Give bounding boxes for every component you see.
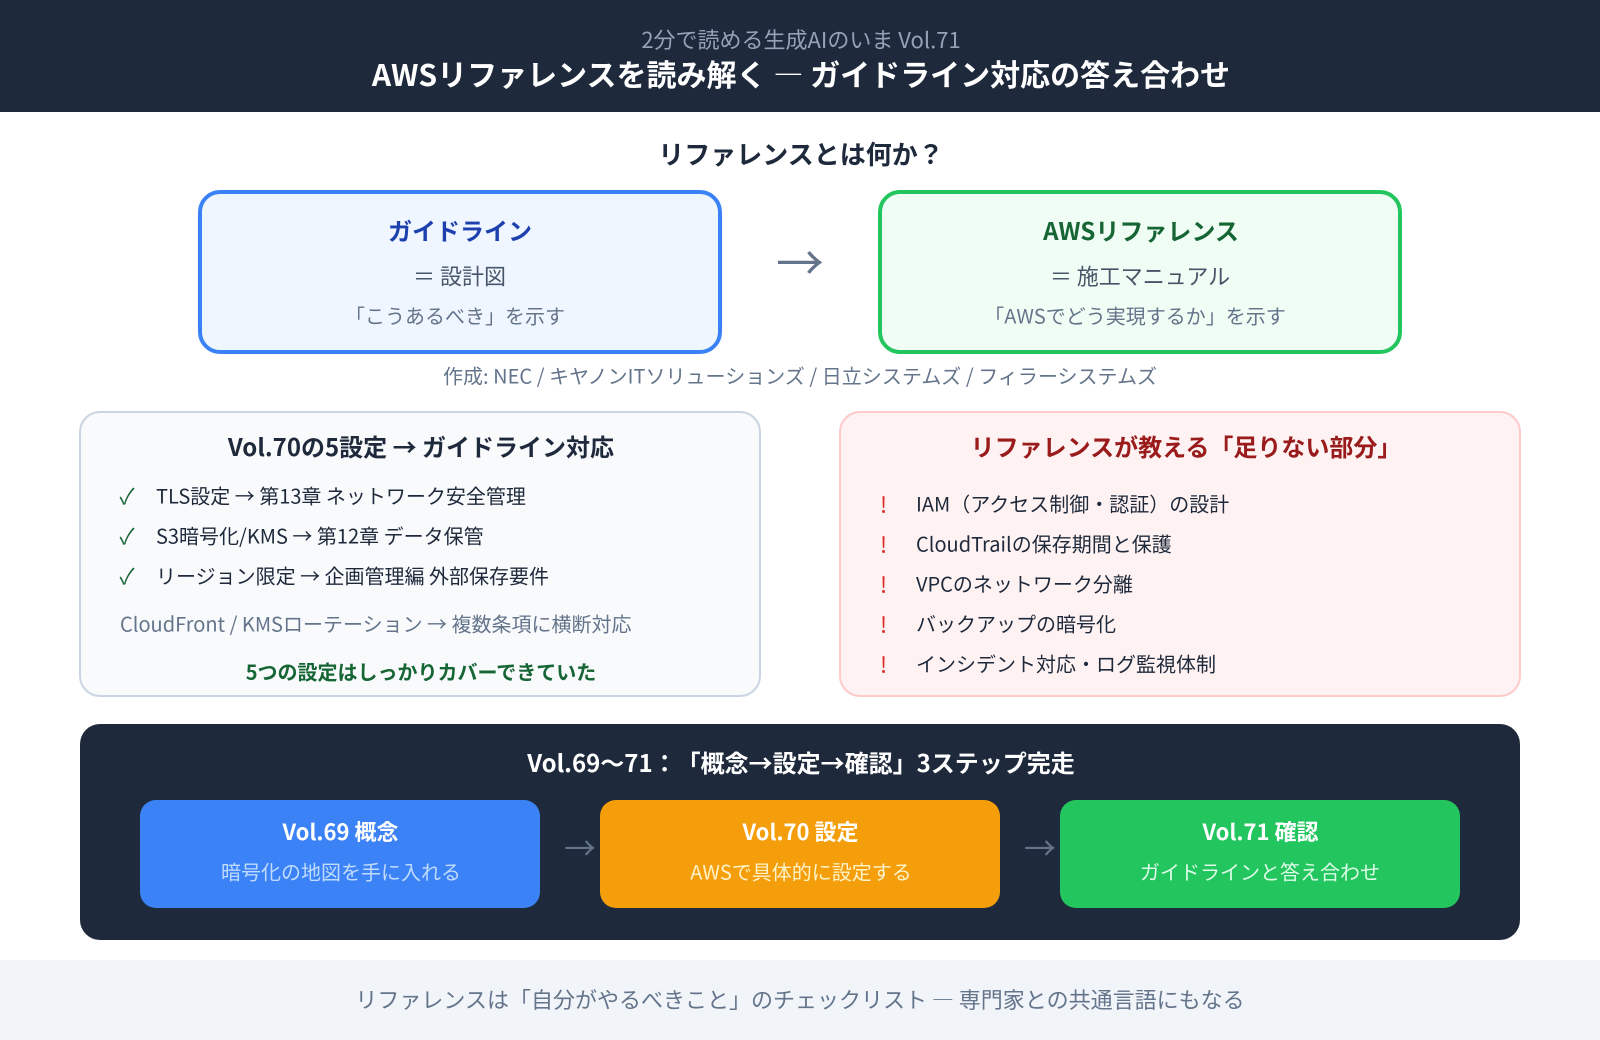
guideline title: ガイドライン (388, 212, 532, 247)
mapping row 3: リージョン限定 → 企画管理編 外部保存要件 (156, 560, 549, 590)
step: Vol.69: 暗号化の地図を手に入れる (221, 856, 461, 886)
mapping row 2: ✓ (120, 519, 136, 551)
missing row 5: ! (880, 648, 887, 680)
missing row 3: ! (880, 568, 887, 600)
footer message: リファレンスは「自分がやるべきこと」のチェックリスト ― 専門家との共通言語にもなる (355, 983, 1245, 1015)
reference title: AWSリファレンス (1042, 212, 1239, 247)
section heading: リファレンスとは何か？ (658, 135, 944, 172)
mapping note: CloudFront / KMSローテーション → 複数条項に横断対応 (120, 608, 632, 638)
panel: Vol.70 settings mapping (80, 412, 760, 696)
panel: three steps (80, 724, 1520, 940)
mapping row 1: ✓ (120, 479, 136, 511)
panel: guideline (200, 192, 720, 352)
missing row 5: インシデント対応・ログ監視体制 (916, 648, 1216, 678)
missing row 1: IAM（アクセス制御・認証）の設計 (916, 488, 1229, 518)
mapping row 1: TLS設定 → 第13章 ネットワーク安全管理 (156, 480, 526, 510)
arrow: guideline to reference: → (776, 224, 824, 294)
missing row 3: VPCのネットワーク分離 (916, 568, 1133, 598)
arrow: step 2 to 3: → (1024, 824, 1056, 870)
missing row 4: ! (880, 608, 887, 640)
step: Vol.71: ガイドラインと答え合わせ (1140, 856, 1380, 886)
panel: AWS reference (880, 192, 1400, 352)
mapping conclusion: 5つの設定はしっかりカバーできていた (246, 656, 596, 686)
mapping row 3: ✓ (120, 559, 136, 591)
step: Vol.70 (600, 800, 1000, 908)
arrow: step 1 to 2: → (564, 824, 596, 870)
header title: AWSリファレンスを読み解く ― ガイドライン対応の答え合わせ (371, 51, 1230, 95)
step: Vol.69 (140, 800, 540, 908)
header band (0, 0, 1600, 112)
guideline description: 「こうあるべき」を示す (345, 300, 565, 330)
footer band (0, 960, 1600, 1040)
step: Vol.70: Vol.70 設定 (742, 815, 858, 847)
reference definition: ＝ 施工マニュアル (1050, 260, 1230, 292)
mapping heading: Vol.70の5設定 → ガイドライン対応 (227, 428, 614, 463)
missing row 2: CloudTrailの保存期間と保護 (916, 528, 1172, 558)
missing row 2: ! (880, 528, 887, 560)
step: Vol.70: AWSで具体的に設定する (690, 856, 912, 886)
header subtitle: 2分で読める生成AIのいま Vol.71 (641, 23, 961, 55)
missing row 1: ! (880, 488, 887, 520)
missing parts heading: リファレンスが教える「足りない部分」 (971, 428, 1401, 463)
authors note: 作成: NEC / キヤノンITソリューションズ / 日立システムズ / フィラーシステムズ (443, 360, 1157, 390)
missing row 4: バックアップの暗号化 (916, 608, 1116, 638)
reference description: 「AWSでどう実現するか」を示す (984, 300, 1286, 330)
guideline definition: ＝ 設計図 (413, 260, 506, 292)
panel: missing parts (840, 412, 1520, 696)
step: Vol.71: Vol.71 確認 (1202, 815, 1318, 847)
steps heading: Vol.69〜71：「概念→設定→確認」3ステップ完走 (526, 744, 1075, 779)
step: Vol.71 (1060, 800, 1460, 908)
step: Vol.69: Vol.69 概念 (282, 815, 398, 847)
mapping row 2: S3暗号化/KMS → 第12章 データ保管 (156, 520, 484, 550)
